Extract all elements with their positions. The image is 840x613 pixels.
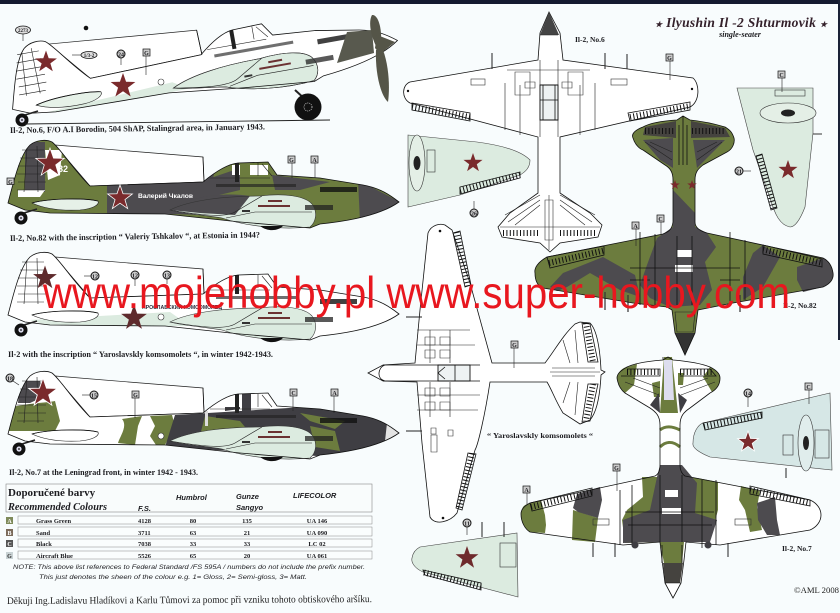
callouts No.6: G (144, 51, 149, 57)
colour table: UA 090 (307, 530, 327, 537)
colour table: 65 (190, 553, 197, 560)
top view: No.7 winter camouflage: G (614, 466, 619, 472)
top view: No.7 winter camouflage: A (524, 488, 529, 494)
label Il-2 No.7: Il-2, No.7 (782, 544, 812, 553)
callouts No.6: 24 (118, 52, 124, 58)
nose camouflage patch (337, 30, 374, 63)
colour table: A (7, 519, 12, 525)
wing panel: bottom left: 11 (464, 521, 470, 527)
colour table: B (7, 531, 12, 537)
colour table: Gunze (236, 492, 259, 501)
top view: No.6 white: G (667, 56, 672, 62)
colour table: Humbrol (176, 493, 208, 502)
wing panel: bottom left (412, 519, 518, 597)
note: This just denotes the sheen of the colour e.g. 1= Gloss, 2= Semi-gloss, 3= Matt. (39, 574, 307, 581)
colour table: F.S. (138, 504, 151, 513)
colour table: Black (36, 541, 52, 548)
colour table: 4128 (138, 518, 152, 525)
wing panel: No.7 upper right: C (806, 385, 811, 391)
colour table: Sand (36, 530, 50, 537)
tail star No.6 (35, 50, 57, 71)
profile: Il-2 No.82: G (289, 158, 294, 164)
profile: Il-2 No.82: 82 (58, 164, 68, 174)
title: single-seater (718, 30, 762, 39)
callouts No.6: 2273 (18, 29, 28, 34)
top view: Yaroslavsky white (368, 224, 605, 522)
profile: Yaroslavsky komsomolets: 13 (164, 273, 170, 279)
top view: No.82 camouflage: A (633, 224, 638, 230)
label Il-2 No.82: Il-2, No.82 (783, 301, 817, 310)
profile: Il-2 No.7: 15 (91, 393, 97, 399)
caption No.6: Il-2, No.6, F/O A.I Borodin, 504 ShAP, Stalingrad area, in January 1943. (10, 121, 265, 135)
profile: Il-2 No.7: 18 (7, 376, 13, 382)
profile: Il-2 No.82 (7, 140, 400, 230)
caption Yaroslavsky: Il-2 with the inscription “ Yaroslavskly komsomolets “, in winter 1942-1943. (8, 349, 273, 359)
profile: Yaroslavsky komsomolets (8, 252, 399, 342)
profile: Yaroslavsky komsomolets: 12 (132, 273, 138, 279)
wing panel: No.7 upper right: 14 (745, 391, 751, 397)
wing panel: No.6 left (408, 135, 530, 217)
tail wheel No.6 (16, 111, 38, 126)
profile: Il-2 No.82: Валерий Чкалов (138, 192, 193, 200)
colour table: Grass Green (36, 518, 71, 525)
colour table (6, 484, 372, 560)
caption No.82: Il-2, No.82 with the inscription “ Valeriy Tshkalov “, at Estonia in 1944? (10, 230, 260, 243)
propeller (370, 15, 395, 102)
fuselage star No.6 (111, 73, 135, 97)
label Il-2 No.6: Il-2, No.6 (575, 35, 605, 44)
profile: Yaroslavsky komsomolets: ЯРОСЛАВСКИЙ КОМСОМОЛЕЦ (142, 303, 222, 311)
colour table: 3711 (138, 530, 151, 537)
profile: Il-2 No.82: G (8, 180, 13, 186)
profile: Il-2 No.7 (5, 371, 402, 461)
colour table: G (7, 554, 12, 560)
wing panel: C right: 21 (736, 169, 742, 175)
colour table: C (7, 542, 12, 548)
top view: No.7 winter camouflage (521, 357, 821, 598)
colour table: UA 146 (307, 518, 328, 525)
top view: No.6 white (404, 12, 698, 252)
colour table: Aircraft Blue (36, 553, 73, 560)
table heading: Doporučené barvy (8, 487, 96, 499)
profile: Il-2 No.7: A (332, 391, 337, 397)
top view: Yaroslavsky white: G (512, 343, 517, 349)
profile: Il-2 No.82: A (312, 158, 317, 164)
top view: No.82 camouflage: C (658, 217, 663, 223)
copyright: ©AML 2008 (794, 586, 839, 595)
colour table: LC 02 (308, 541, 326, 548)
colour table: UA 061 (307, 553, 327, 560)
main wheel and ground line (25, 90, 330, 124)
wing panel: C right (735, 71, 822, 227)
profile: Il-2 No.6 (12, 23, 398, 114)
colour table: 5526 (138, 553, 152, 560)
top view: No.82 camouflage (535, 116, 833, 355)
colour table: 7038 (138, 541, 152, 548)
wing panel: No.6 left: 26 (471, 211, 477, 217)
colour table: 135 (242, 518, 253, 525)
colour table: 21 (244, 530, 250, 537)
profile: Yaroslavsky komsomolets: 12 (92, 274, 98, 280)
note: NOTE: This above list references to Federal Standard /FS 595A / numbers do not include the prefix number. (13, 564, 365, 571)
caption No.7: Il-2, No.7 at the Leningrad front, in winter 1942 - 1943. (9, 467, 198, 477)
colour table: 33 (190, 541, 197, 548)
colour table: 20 (244, 553, 250, 560)
label Yaroslavskly komsomolets: “ Yaroslavskly komsomolets “ (487, 431, 593, 440)
colour table: 33 (244, 541, 251, 548)
colour table: Sangyo (236, 503, 264, 512)
callouts No.6: 1/3-2 (84, 54, 95, 59)
wing panel: No.7 upper right (693, 383, 832, 478)
title: ★ Ilyushin Il -2 Shturmovik ★ (655, 15, 829, 30)
colour table: 80 (190, 518, 196, 525)
watermark: www.mojehobby.pl www.super-hobby.com (42, 267, 790, 318)
colour table: Recommended Colours (7, 501, 107, 513)
right dark edge (838, 0, 840, 340)
top dark edge (0, 0, 840, 4)
title (655, 15, 829, 39)
note (13, 564, 365, 581)
colour table: 63 (190, 530, 197, 537)
profile: Il-2 No.7: G (133, 393, 138, 399)
callouts No.6 (16, 26, 164, 85)
wing panel: C right: C (779, 73, 784, 79)
thanks line: Děkuji Ing.Ladislavu Hladíkovi a Karlu Tůmovi za pomoc při vzniku tohoto obtiskového aršíku. (7, 594, 372, 607)
colour table: LIFECOLOR (293, 491, 337, 500)
profile: Il-2 No.7: C (291, 391, 296, 397)
